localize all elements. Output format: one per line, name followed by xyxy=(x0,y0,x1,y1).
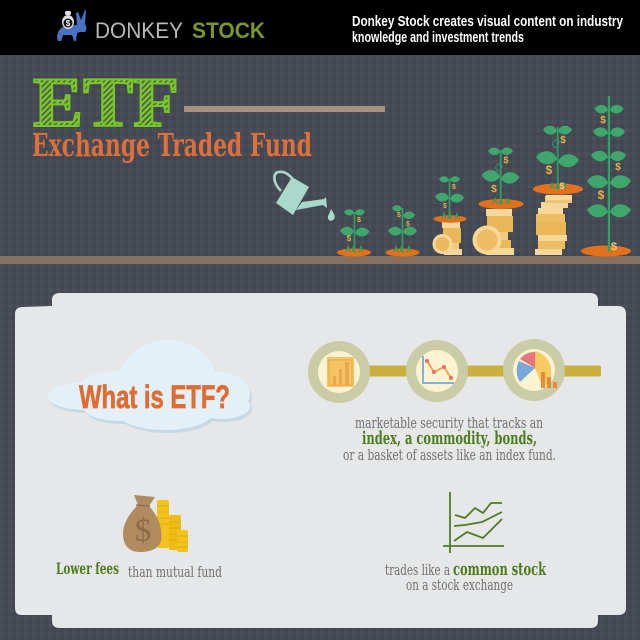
coin stack 5 with plant: $ xyxy=(559,181,565,191)
icon: money bag with coins: $ xyxy=(135,513,151,549)
plant 6: $ xyxy=(598,188,605,202)
lower fees text xyxy=(56,559,222,581)
logo wordmark: DONKEY xyxy=(95,18,183,43)
coin stack 3 with plant: $ xyxy=(443,203,447,210)
icon: watering can xyxy=(274,172,335,221)
trades text: trades like a xyxy=(385,561,450,579)
definition text xyxy=(343,414,556,464)
subtitle: Exchange Traded Fund xyxy=(32,126,312,164)
icon timeline xyxy=(308,339,601,403)
definition text: or a basket of assets like an index fund. xyxy=(343,446,556,464)
definition text: index, a commodity, bonds, xyxy=(362,428,537,449)
icon: pie chart xyxy=(503,339,565,401)
coin stack 5 with plant xyxy=(533,126,583,255)
cloud heading: What is ETF? xyxy=(79,379,230,415)
shelf xyxy=(0,256,640,264)
trades text xyxy=(385,559,546,594)
header tagline: knowledge and investment trends xyxy=(352,30,524,46)
plant 2: $ xyxy=(406,221,410,228)
plant 6 xyxy=(581,96,631,256)
panel: what is ETF xyxy=(15,293,626,628)
header bar xyxy=(0,0,640,55)
icon: money bag with coins xyxy=(123,495,188,552)
coin stack 4 with plant: $ xyxy=(503,155,509,165)
coin stack 5 with plant: $ xyxy=(546,163,553,177)
icon: bar chart box xyxy=(308,341,370,403)
coin stack 4 with plant xyxy=(472,148,524,255)
lower fees text: than mutual fund xyxy=(128,563,222,581)
plant 6: $ xyxy=(615,162,621,173)
header tagline xyxy=(352,14,623,46)
logo wordmark accent: STOCK xyxy=(192,18,265,43)
icon: line chart xyxy=(406,340,468,402)
cloud heading xyxy=(47,340,252,433)
coin stack 3 with plant xyxy=(432,176,466,255)
plant 6: $ xyxy=(611,241,617,253)
trades text: on a stock exchange xyxy=(406,576,513,594)
coin stack 3 with plant: $ xyxy=(452,184,456,191)
title: ETF: ETF xyxy=(33,64,179,142)
plant 1: $ xyxy=(347,234,352,243)
plant 1: $ xyxy=(357,217,361,224)
icon: donkey logo xyxy=(57,10,86,41)
title rule xyxy=(184,106,385,112)
coin stack 5 with plant: $ xyxy=(560,135,566,146)
plant 6: $ xyxy=(600,115,606,126)
plant 1 xyxy=(337,209,371,256)
icon: stock line chart xyxy=(443,492,504,553)
plant 2 xyxy=(386,205,420,256)
lower fees text: Lower fees xyxy=(56,559,119,578)
icon: donkey logo: $ xyxy=(66,19,71,28)
trades text: common stock xyxy=(453,559,546,580)
coin stack 4 with plant: $ xyxy=(491,184,497,195)
definition text: marketable security that tracks an xyxy=(355,414,543,432)
plant 2: $ xyxy=(397,212,401,219)
